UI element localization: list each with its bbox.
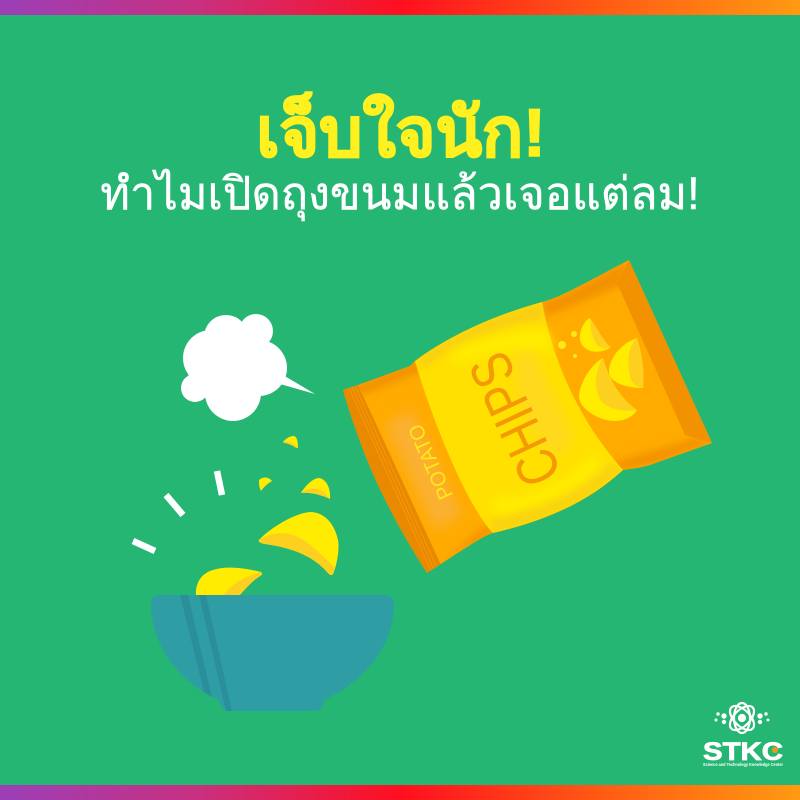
yellow band	[415, 302, 623, 533]
right dark strip	[617, 260, 712, 443]
subtitle: ทำไมเปิดถุงขนมแล้วเจอแต่ลม!	[100, 168, 700, 221]
label: CHIPS: CHIPS	[457, 343, 574, 496]
logo wordmark: STKC	[703, 738, 783, 766]
chip entering bowl	[196, 568, 262, 596]
bowl	[151, 595, 394, 711]
bag chip pictures	[558, 318, 644, 421]
top gradient bar	[0, 0, 800, 15]
title: เจ็บใจนัก!	[256, 92, 546, 171]
motion ticks	[133, 471, 222, 551]
illustration: chips bag	[343, 260, 712, 573]
bottom gradient bar	[0, 785, 800, 800]
logo atom icon	[726, 702, 758, 734]
logo tagline: Science and Technology Knowledge Center	[703, 762, 783, 767]
label: POTATO: POTATO	[404, 420, 458, 503]
falling chips	[196, 436, 339, 596]
large chip	[259, 512, 339, 575]
left crimp	[343, 385, 440, 573]
logo: STKC	[703, 702, 783, 767]
bag base	[343, 260, 712, 573]
icon: air puff cloud	[181, 314, 315, 421]
